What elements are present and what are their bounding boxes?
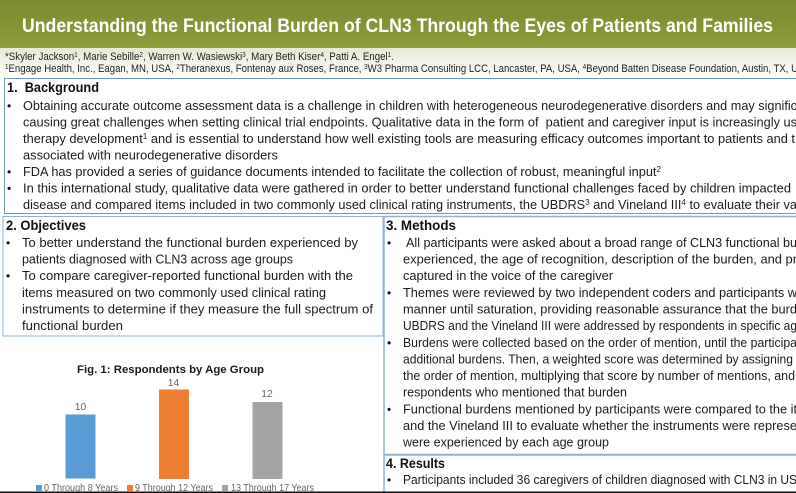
methods bullet list: captured in the voice of the caregiver — [403, 269, 613, 283]
authors and affiliations: *Skyler Jackson — [5, 51, 80, 63]
methods bullet list: All participants were asked about a broad range of CLN3 functional bu — [406, 236, 796, 250]
authors and affiliations: . — [391, 51, 394, 63]
background bullet list: causing great challenges when setting clinical trial endpoints. Qualitative data in the form of patient and caregiver input is increasingly us — [23, 116, 796, 130]
methods bullet list — [387, 236, 796, 450]
background bullet list: 4 — [681, 198, 687, 207]
objectives bullet list: patients diagnosed with CLN3 across age groups — [22, 252, 293, 266]
methods bullet list: and the Vineland III to evaluate whether the instruments were represe — [403, 419, 796, 433]
background bullet list: 3 — [585, 198, 590, 207]
background bullet list — [7, 99, 796, 212]
bar: 13 through 17 years — [252, 389, 282, 479]
authors and affiliations: 1 — [388, 52, 391, 59]
authors and affiliations — [0, 48, 796, 78]
authors and affiliations: 3 — [364, 64, 368, 71]
authors and affiliations: , Mary Beth Kiser — [246, 51, 321, 63]
authors and affiliations: 4 — [583, 64, 586, 71]
methods bullet list: Functional burdens mentioned by participants were compared to the it — [403, 402, 796, 416]
bar: 13 through 17 years: 12 — [261, 389, 273, 400]
methods bullet list: respondents who mentioned that burden — [403, 386, 627, 400]
objectives bullet list: • — [6, 269, 10, 283]
heading: methods: 3. Methods — [386, 217, 456, 233]
background bullet list: • — [7, 182, 11, 196]
authors and affiliations: 1 — [74, 52, 78, 59]
methods bullet list: • — [387, 236, 391, 250]
background bullet list: associated with neurodegenerative disorders — [23, 148, 278, 162]
methods bullet list: the order of mention, multiplying that score by number of mentions, and — [403, 369, 795, 383]
title banner — [0, 0, 796, 48]
objectives bullet list: • — [6, 236, 10, 250]
methods bullet list: Burdens were collected based on the order of mention, until the participa — [403, 336, 796, 350]
objectives bullet list: functional burden — [22, 319, 123, 333]
bar chart: respondents by age group — [36, 364, 314, 493]
methods bullet list: experienced, the age of recognition, description of the burden, and pr — [403, 252, 796, 266]
authors and affiliations: 2 — [176, 64, 180, 71]
objectives bullet list — [6, 236, 374, 333]
authors and affiliations: W3 Pharma Consulting LCC, Lancaster, PA, USA, — [368, 63, 583, 75]
heading: background: 1. Background — [7, 79, 99, 95]
authors and affiliations: 3 — [242, 52, 246, 59]
objectives bullet list: items measured on two commonly used clinical rating — [22, 286, 326, 300]
objectives bullet list: To better understand the functional burden experienced by — [22, 236, 359, 250]
methods bullet list: • — [387, 286, 391, 300]
methods bullet list: • — [387, 336, 391, 350]
methods bullet list: • — [387, 402, 391, 416]
authors and affiliations: , Warren W. Wasiewski — [143, 51, 242, 63]
methods bullet list: additional burdens. Then, a weighted score was determined by assigning — [403, 352, 793, 366]
chart title: Fig. 1: Respondents by Age Group — [77, 364, 264, 376]
background bullet list: • — [7, 99, 11, 113]
background bullet list: In this international study, qualitative data were gathered in order to better understand functional challenges faced by children impacted — [23, 182, 791, 196]
panel: objectives — [3, 216, 383, 336]
panel: methods — [384, 216, 796, 454]
authors and affiliations: 1 — [5, 64, 9, 71]
methods bullet list: were experienced by each age group — [402, 436, 609, 450]
background bullet list: therapy development — [23, 132, 140, 146]
background bullet list: 1 — [143, 132, 148, 141]
bar: 9 through 12 years — [159, 378, 189, 479]
authors and affiliations: 4 — [320, 52, 324, 59]
background bullet list: • — [7, 165, 11, 179]
background bullet list: to evaluate their va — [686, 198, 796, 212]
results bullet: • — [387, 473, 391, 487]
heading: results: 4. Results — [386, 455, 445, 471]
background bullet list: and is essential to understand how well existing tools are measuring efficacy outcomes important to patients and t — [147, 132, 796, 146]
authors and affiliations: Engage Health, Inc., Eagan, MN, USA, — [9, 63, 176, 75]
bar: 0 through 8 years — [66, 402, 96, 478]
objectives bullet list: instruments to determine if they measure the full spectrum of — [22, 302, 374, 316]
authors and affiliations: Theranexus, Fontenay aux Roses, France, — [180, 63, 364, 75]
panel: results — [384, 455, 796, 493]
chart legend — [36, 483, 314, 493]
methods bullet list: manner until saturation, providing reasonable assurance that the burd — [403, 302, 796, 316]
background bullet list: disease and compared items included in two commonly used clinical rating instruments, the UBDRS — [23, 198, 575, 212]
methods bullet list: Themes were reviewed by two independent coders and participants w — [403, 286, 796, 300]
bar: 0 through 8 years: 10 — [75, 402, 86, 413]
authors and affiliations: , Patti A. Engel — [324, 51, 388, 63]
authors and affiliations: 2 — [139, 52, 143, 59]
bar: 9 through 12 years: 14 — [168, 378, 179, 389]
objectives bullet list: To compare caregiver-reported functional burden with the — [22, 269, 353, 283]
authors and affiliations: , Marie Sebille — [78, 51, 139, 63]
background bullet list: FDA has provided a series of guidance documents intended to facilitate the collection of robust, meaningful input — [23, 165, 644, 179]
panel: background — [4, 78, 796, 214]
background bullet list: and Vineland III — [590, 198, 681, 212]
background bullet list: Obtaining accurate outcome assessment data is a challenge in children with heterogeneous neurodegenerative disorders and may signific — [23, 99, 796, 113]
background bullet list: 2 — [656, 165, 662, 174]
heading: objectives: 2. Objectives — [6, 217, 86, 233]
